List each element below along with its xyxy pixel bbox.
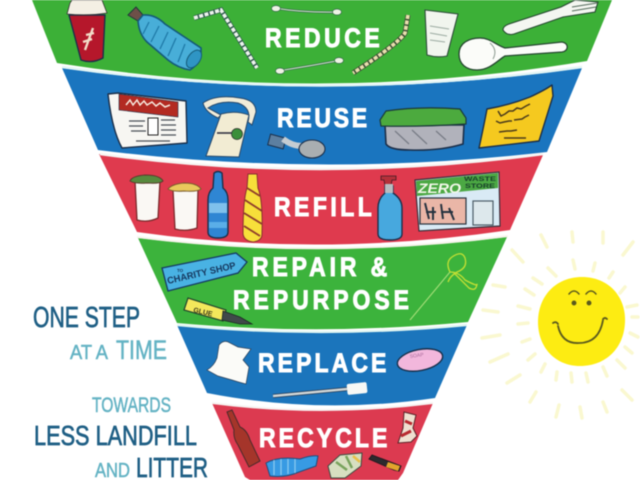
icon: newspaper [108,93,187,148]
text block: towards less landfill and litter: TOWARDS [92,394,171,417]
icon: zero waste store [415,172,500,231]
icon: crushed plastic bottle [266,456,318,476]
text block: one step at a time [33,302,167,365]
icon: plastic fork [503,0,598,34]
icon: red takeaway cup [67,0,107,62]
heading: refill: REFILL [274,192,372,222]
icon: lunch box [380,108,466,150]
text block: one step at a time: ONE STEP [33,302,140,334]
icon: zero waste store: WASTE [464,176,497,183]
icon: yellow-lid jar [168,183,201,230]
icon: pump bottle [378,176,402,240]
icon: soap bar [395,345,445,375]
icon: charity shop sign [162,253,247,291]
icon: blue reusable bottle [208,172,228,238]
icon: needle and thread [410,254,477,320]
panel: repair and repurpose band [137,236,508,329]
icon: striped bent straw [194,10,257,68]
icon: beaded straw [353,15,408,73]
heading: repair and: REPAIR & [252,252,387,282]
icon: green-lid jar [130,175,163,221]
icon: plastic water bottle [128,7,205,71]
icon: cloth bag [203,97,256,157]
icon: glue tube: GLUE [193,307,213,318]
heading: recycle: RECYCLE [259,423,387,453]
icon: crisp packet [398,412,417,443]
icon: natural sponge [207,341,251,384]
icon: cotton bud top [272,6,342,15]
heading: reduce: REDUCE [265,23,380,53]
icon: brown glass bottle [227,410,260,467]
panel: refill band [99,154,543,245]
icon: smiling sun [482,232,638,418]
icon: zero waste store: ZERO [417,180,461,196]
icon: plastic cup [425,10,458,57]
icon: crushed can [328,453,362,478]
panel: reduce band [32,0,612,84]
sun rays [482,232,638,418]
icon: yellow striped flask [243,174,262,242]
text block: towards less landfill and litter: LESS LANDFILL [34,420,197,451]
icon: toothbrush [273,382,368,396]
icon: glue tube [184,298,252,324]
heading: repurpose: REPURPOSE [233,285,409,315]
heading: reuse: REUSE [277,103,367,133]
text block: one step at a time: AT A [70,342,109,364]
text block: one step at a time: TIME [116,335,167,365]
icon: cotton bud bottom [276,58,344,74]
heading: replace: REPLACE [258,348,386,378]
icon: charity shop sign: TO [177,268,184,273]
panel: recycle band [212,403,433,480]
icon: plastic spoon [459,38,567,70]
icon: battery [369,455,401,471]
icon: zero waste store: STORE [465,183,496,190]
text block: towards less landfill and litter [34,394,208,480]
icon: spork [268,134,325,158]
sun face [553,291,607,343]
icon: charity shop sign: CHARITY SHOP [166,260,238,287]
icon: yellow note [479,85,553,148]
icon: soap bar: SOAP [409,352,425,360]
panel: replace band [177,325,467,405]
panel: reuse band [62,67,582,165]
